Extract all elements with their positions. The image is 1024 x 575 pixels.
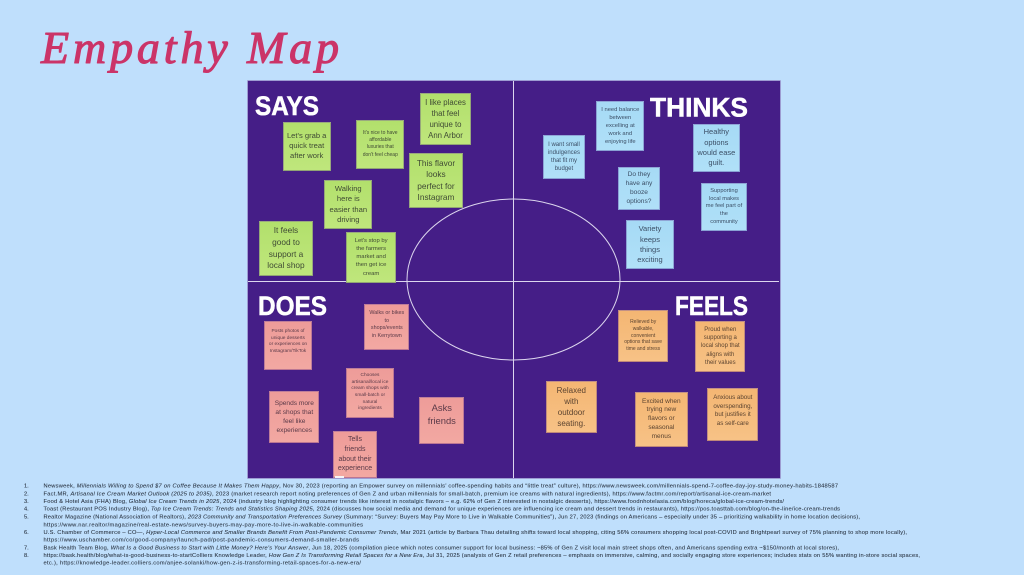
panel: feels notes xyxy=(546,310,758,447)
note: It's nice xyxy=(356,120,404,169)
references list: Newsweek, Millennials Willing to Spend $7 on Coffee Because It Makes Them Happy, Nov 30, 2023 (reporting an Empower survey on millennials’ coffee-spending habits and “little treat” culture), https://www.newsweek.com/millennials-spend-7-coffee-day-joy-study-money-habits-1848587 xyxy=(44,484,838,490)
note: Walks or bikes xyxy=(364,304,409,350)
note: Proud xyxy=(695,321,745,372)
references list: https://bask.health/blog/what-is-good-business-to-startColliers Knowledge Leader, How Gen Z Is Transforming Retail Spaces for a New Era, Jul 31, 2025 (analysis of Gen Z retail preferences – emphasis on immersive, calming, and socially engaging store experiences; includes stats on 55% wanting in-store social spaces, xyxy=(44,553,920,559)
note: Let's stop: cream xyxy=(363,271,379,277)
note: Chooses: artisanal/local ice xyxy=(352,380,388,385)
note: Spends more: Spends more xyxy=(275,400,314,407)
note: Excited: seasonal xyxy=(648,424,674,431)
note: Supporting local: community xyxy=(710,219,738,225)
note: Walking: easier than xyxy=(330,205,367,214)
note: Let's grab xyxy=(283,122,331,171)
note: Chooses: small-batch or xyxy=(355,393,385,398)
note: Walks or bikes: shops/events xyxy=(371,325,403,331)
note: Relieved: Relieved by xyxy=(630,319,656,325)
note: Supporting local: me feel part of xyxy=(706,203,742,209)
quadrant headings: THINKS xyxy=(650,92,748,122)
note: Relieved: time and stress xyxy=(626,346,660,352)
note: Let's stop: Let's stop by xyxy=(355,238,388,244)
note: Supporting local: Supporting xyxy=(710,188,738,194)
note: Chooses: natural xyxy=(363,400,377,405)
note: Excited: flavors or xyxy=(648,415,675,422)
references list: 5. xyxy=(24,514,29,520)
panel: empathy map background xyxy=(248,81,780,478)
note: Let's grab: after work xyxy=(290,151,323,160)
references list: etc.), https://knowledge-leader.colliers.com/anjee-solanki/how-gen-z-is-transforming-retail-spaces-for-a-new-era/ xyxy=(44,561,361,567)
note: Proud: aligns with xyxy=(706,352,734,358)
references list: 2. xyxy=(24,491,29,497)
note: Anxious xyxy=(707,388,758,441)
note: Spends more: at shops that xyxy=(275,409,313,416)
note: Tells friends: Tells xyxy=(348,436,362,443)
references list: 3. xyxy=(24,499,29,505)
note: This flavor: This flavor xyxy=(417,158,455,168)
note: Supporting local: local makes xyxy=(709,196,739,202)
note: Do they: have any xyxy=(626,180,652,187)
note: It's nice: It's nice to have xyxy=(363,130,398,136)
quadrant headings: SAYS xyxy=(255,91,319,121)
note: Anxious: overspending, xyxy=(713,403,752,410)
note: Walking: Walking xyxy=(335,184,362,193)
note: Anxious: as self-care xyxy=(717,420,749,427)
note: Do they: booze xyxy=(630,189,648,196)
panel: says notes xyxy=(259,93,471,283)
note: Let's stop: the farmers xyxy=(356,246,386,252)
note: I want small xyxy=(543,135,585,179)
note: I like places: I like places xyxy=(425,98,466,107)
note: Walking: here is xyxy=(337,194,360,203)
references list: https://www.nar.realtor/magazine/real-estate-news/survey-buyers-may-pay-more-to-live-in-walkable-communities xyxy=(44,522,363,528)
note: Variety: exciting xyxy=(637,255,663,264)
note: It feels good: local shop xyxy=(267,260,305,270)
note: Proud: local shop that xyxy=(701,343,740,349)
note: Relieved: walkable, xyxy=(633,326,654,332)
note: Excited: trying new xyxy=(647,406,676,413)
note: Tells friends xyxy=(333,431,377,478)
note: It feels good: good to xyxy=(272,237,300,247)
note: Let's stop xyxy=(346,232,396,283)
note: I want small: I want small xyxy=(548,142,580,148)
note: This flavor: looks xyxy=(426,169,446,179)
references list: 1. xyxy=(24,484,29,490)
note: Let's grab: Let's grab a xyxy=(287,131,326,140)
quadrant headings: FEELS xyxy=(675,291,748,321)
note: I like places xyxy=(420,93,471,145)
references list: 4. xyxy=(24,507,29,513)
note: Posts photos xyxy=(264,321,312,370)
note: Excited: menus xyxy=(652,433,671,440)
note: Let's stop: market and xyxy=(356,254,386,260)
note: Spends more: feel like xyxy=(283,418,305,425)
note: It feels good: support a xyxy=(269,249,303,259)
note: Do they: Do they xyxy=(628,171,650,178)
note: I need balance xyxy=(596,101,644,151)
note: Relieved xyxy=(618,310,668,362)
note: Excited: Excited when xyxy=(642,398,681,405)
note: Anxious: Anxious about xyxy=(713,394,752,401)
note: Relaxed: Relaxed xyxy=(557,386,586,395)
note: I like places: that feel xyxy=(432,109,459,118)
note: Tells friends: friends xyxy=(344,446,365,453)
note: Posts photos: unique desserts xyxy=(271,336,305,341)
note: I like places: unique to xyxy=(429,120,462,129)
note: Relaxed: with xyxy=(564,397,578,406)
references list: Food & Hotel Asia (FHA) Blog, Global Ice Cream Trends in 2025, 2024 (industry blog highlighting consumer trends like interest in nostalgic flavors – e.g. 62% of Gen Z interested in nostalgic desserts), https://www.foodnhotelasia.com/blog/horeca/global-ice-cream-trends/ xyxy=(44,499,784,505)
note: Relaxed xyxy=(546,381,597,433)
note: Let's grab: quick treat xyxy=(289,141,324,150)
note: Supporting local xyxy=(701,183,747,231)
note: Variety: Variety xyxy=(639,224,661,233)
note: Anxious: but justifies it xyxy=(715,411,751,418)
note: I need balance: enjoying life xyxy=(605,139,636,145)
note: I need balance: work and xyxy=(609,131,632,137)
note: Healthy: would ease xyxy=(697,148,735,157)
note: Chooses: ingredients xyxy=(358,406,382,411)
note: I like places: Ann Arbor xyxy=(428,131,463,140)
note: I need balance: excelling at xyxy=(606,123,635,129)
note: Walking xyxy=(324,180,372,229)
note: Relaxed: seating. xyxy=(557,419,585,428)
note: Relaxed: outdoor xyxy=(558,408,585,417)
note: Walking: driving xyxy=(337,215,359,224)
note: It feels good xyxy=(259,221,313,276)
note: Spends more xyxy=(269,391,319,443)
references list: 7. xyxy=(24,545,29,551)
note: Excited xyxy=(635,392,688,447)
references list: U.S. Chamber of Commerce – CO—, Hyper-Local Commerce and Smaller Brands Benefit From Post-Pandemic Consumer Trends, Mar 2021 (article by Barbara Thau detailing shifts toward local shopping, citing 56% consumers shopping local post-COVID and Brightpearl survey of 75% planning to shop more locally), xyxy=(44,530,907,536)
note: Let's stop: then get ice xyxy=(356,262,386,268)
note: Tells friends: about their xyxy=(338,456,372,463)
small white marker on note xyxy=(335,476,344,478)
references list: Fact.MR, Artisanal Ice Cream Market Outlook (2025 to 2035), 2023 (market research report noting preferences of Gen Z and urban millennials for small-batch, premium ice creams with natural ingredients), https://www.factmr.com/report/artisanal-ice-cream-market xyxy=(44,491,771,497)
note: Relieved: options that save xyxy=(624,339,662,345)
note: It's nice: affordable xyxy=(369,137,391,143)
note: This flavor xyxy=(409,153,463,208)
note: Proud: supporting a xyxy=(704,335,737,341)
note: Variety: things xyxy=(640,245,660,254)
note: Walks or bikes: Walks or bikes xyxy=(369,310,404,316)
note: Walks or bikes: to xyxy=(385,318,389,324)
note: Variety: keeps xyxy=(640,235,660,244)
note: I want small: budget xyxy=(555,166,573,172)
note: I want small: indulgences xyxy=(548,150,580,156)
references list: 8. xyxy=(24,553,29,559)
references list: Bask Health Team Blog, What Is a Good Business to Start with Little Money? Here’s Your Answer, Jun 18, 2025 (compilation piece which notes consumer support for local business: ~85% of Gen Z visit local main street shops often, and Americans spending extra ~$150/month at local stores), xyxy=(44,545,839,551)
references list: Toast (Restaurant POS Industry Blog), Top Ice Cream Trends: Trends and Statistics Shaping 2025, 2024 (discusses how social media and demand for unique experiences are influencing ice cream and dessert trends in restaurants), https://pos.toasttab.com/blog/on-the-line/ice-cream-trends xyxy=(44,507,840,513)
references list: Realtor Magazine (National Association of Realtors), 2023 Community and Transportation Preferences Survey (Summary: “Survey: Buyers May Pay More to Live in Walkable Communities”), Jun 27, 2023 (findings on Americans – especially under 35 – prioritizing walkability in home location decisions), xyxy=(44,514,860,520)
panel: thinks notes xyxy=(543,101,747,269)
note: Healthy: guilt. xyxy=(708,158,724,167)
quadrant headings: DOES xyxy=(258,291,327,321)
note: Relieved: convenient xyxy=(631,333,655,339)
note: It feels good: It feels xyxy=(274,225,298,235)
note: Asks friends xyxy=(419,397,464,444)
note: Healthy: Healthy xyxy=(704,127,729,136)
note: Asks friends: friends xyxy=(428,415,456,426)
panel: does notes xyxy=(264,304,464,478)
note: This flavor: perfect for xyxy=(417,181,455,191)
note: Posts photos: Posts photos of xyxy=(271,329,305,334)
note: Supporting local: the xyxy=(720,211,728,217)
note: Proud: their values xyxy=(705,360,736,366)
note: Healthy: options xyxy=(704,138,728,147)
note: Healthy xyxy=(693,124,740,172)
references list: https://www.uschamber.com/co/good-company/launch-pad/post-pandemic-consumers-demand-smaller-brands xyxy=(44,538,359,544)
note: Variety xyxy=(626,220,674,269)
note: It's nice: luxuries that xyxy=(367,144,394,150)
note: Chooses: Chooses xyxy=(361,373,379,378)
note: Walks or bikes: in Kerrytown xyxy=(372,333,402,339)
note: Posts photos: Instagram/TikTok xyxy=(270,349,306,354)
note: Asks friends: Asks xyxy=(432,402,452,413)
note: Do they xyxy=(618,167,660,210)
title: Empathy Map xyxy=(40,22,339,73)
note: Chooses xyxy=(346,368,394,418)
note: I want small: that fit my xyxy=(551,158,577,164)
note: Posts photos: or experiences on xyxy=(269,342,307,347)
note: Do they: options? xyxy=(626,198,651,205)
references list: 6. xyxy=(24,530,29,536)
note: Proud: Proud when xyxy=(704,327,736,333)
note: Spends more: experiences xyxy=(277,427,312,434)
note: Chooses: cream shops with xyxy=(351,386,389,391)
note: It's nice: don't feel cheap xyxy=(363,152,398,158)
note: This flavor: Instagram xyxy=(418,192,454,202)
note: I need balance: I need balance xyxy=(601,107,639,113)
note: I need balance: between xyxy=(609,115,631,121)
note: Tells friends: experience xyxy=(338,465,372,472)
